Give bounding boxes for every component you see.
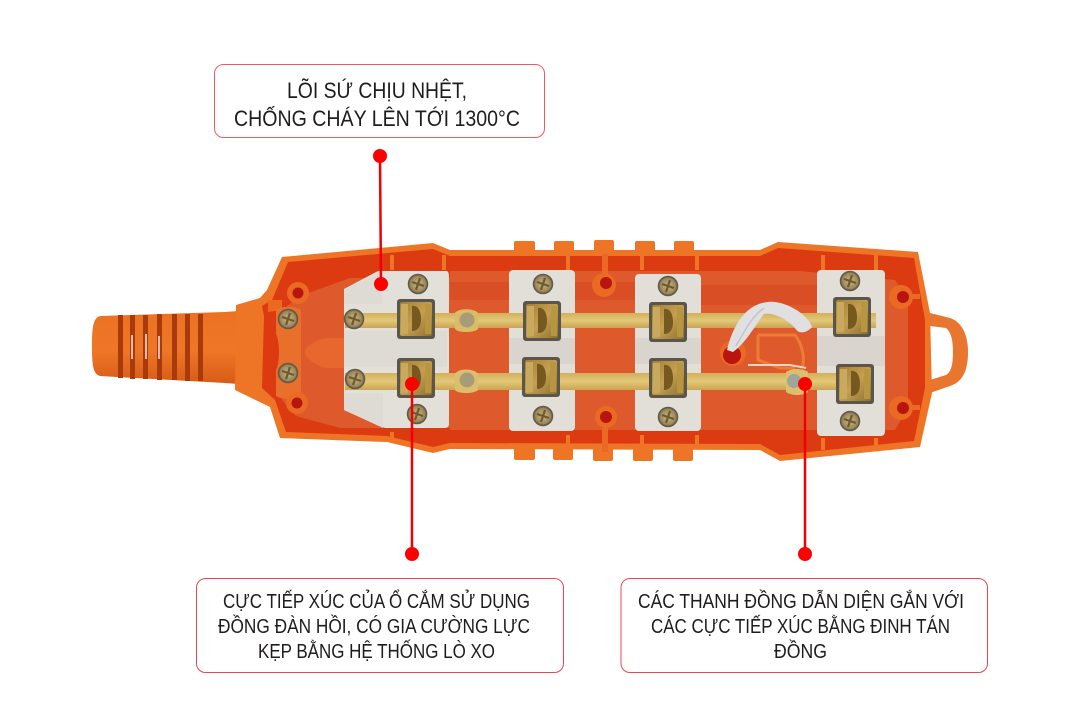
brass bar bottom xyxy=(345,369,838,395)
side tabs xyxy=(514,240,694,461)
ceramic block 3 xyxy=(635,274,701,431)
callout: contact poles xyxy=(196,578,564,672)
shell floor xyxy=(282,271,908,430)
inner ribs xyxy=(392,255,876,450)
callout: heat-resistant core: LÕI SỨ CHỊU NHỆT, xyxy=(287,78,467,103)
white insulated wire xyxy=(727,302,812,352)
callout: heat-resistant core xyxy=(214,64,544,138)
outer shell xyxy=(235,242,932,461)
callout: copper bars xyxy=(621,578,988,672)
callout: copper bars: CÁC THANH ĐỒNG DẪN DIỆN GẮN VỚI xyxy=(638,589,964,613)
ceramic block 2 xyxy=(509,270,575,431)
pointer: copper bars xyxy=(798,377,812,561)
pointer: heat-resistant core xyxy=(373,149,388,291)
mounting posts xyxy=(286,254,920,452)
contact clips xyxy=(397,297,874,404)
callout: copper bars: ĐỒNG xyxy=(774,639,827,663)
callout: contact poles: KẸP BẰNG HỆ THỐNG LÒ XO xyxy=(258,639,495,663)
callout: contact poles: CỰC TIẾP XÚC CỦA Ổ CẮM SỬ DỤNG xyxy=(223,589,530,613)
pointer: contact poles xyxy=(405,377,419,561)
shell interior wall xyxy=(262,248,925,455)
callout: copper bars: CÁC CỰC TIẾP XÚC BẰNG ĐINH TÁN xyxy=(651,614,950,638)
brass bar top xyxy=(344,309,876,332)
cable boot xyxy=(92,311,264,384)
ceramic block 4 xyxy=(817,270,885,436)
bare wire strand xyxy=(748,365,806,368)
callout: contact poles: ĐỒNG ĐÀN HỒI, CÓ GIA CƯỜNG LỰC xyxy=(218,614,530,638)
handle loop xyxy=(930,313,968,393)
cable clamp xyxy=(276,307,301,399)
ceramic block 1 xyxy=(344,271,449,428)
photo: opened socket strip xyxy=(92,240,968,461)
callout: heat-resistant core: CHỐNG CHÁY LÊN TỚI 1300°C xyxy=(234,105,520,131)
